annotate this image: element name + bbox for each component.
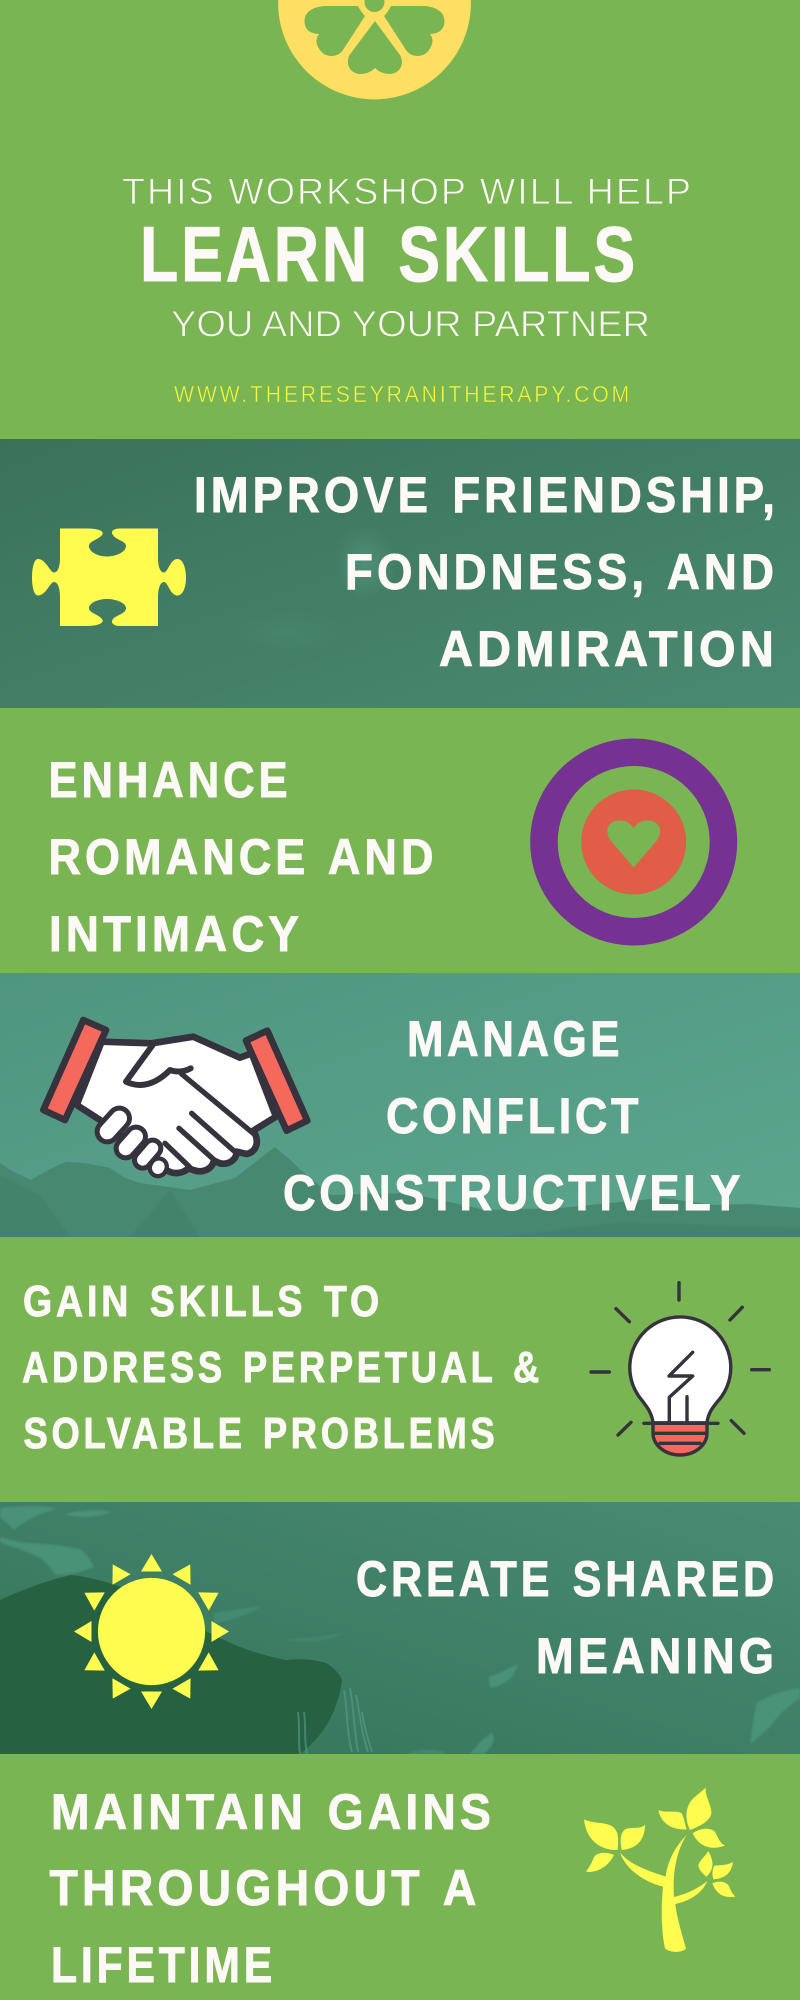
panel: conflict: [0, 973, 800, 1237]
text: this workshop will help: THIS WORKSHOP WILL HELP: [122, 170, 693, 212]
panel: perpetual problems: [0, 1237, 800, 1502]
text: gain skills to address perpetual and solvable problems: GAIN SKILLS TO: [23, 1277, 383, 1326]
icon: light bulb: [591, 1283, 769, 1455]
text: maintain gains throughout a lifetime: MAINTAIN GAINS: [51, 1784, 495, 1840]
panel: maintain gains: [0, 1754, 800, 2000]
text: create shared meaning: [356, 1551, 778, 1684]
text: enhance romance and intimacy: INTIMACY: [49, 906, 303, 962]
icon: target with heart: [530, 738, 737, 946]
text: improve friendship, fondness, and admiration: [194, 467, 779, 677]
text: enhance romance and intimacy: [48, 752, 438, 962]
icon: sun: [74, 1554, 229, 1709]
icon: handshake: [43, 1020, 307, 1173]
icon: puzzle piece: [32, 528, 186, 626]
text: manage conflict constructively: [283, 1011, 744, 1221]
waterfalls: [298, 1688, 372, 1754]
text: maintain gains throughout a lifetime: LIFETIME: [51, 1937, 276, 1993]
panel: friendship: [0, 439, 800, 708]
text: manage conflict constructively: CONSTRUCTIVELY: [283, 1165, 744, 1221]
text: improve friendship, fondness, and admiration: ADMIRATION: [439, 621, 778, 677]
text: gain skills to address perpetual and solvable problems: [22, 1277, 543, 1458]
panel: romance: [0, 708, 800, 973]
text: enhance romance and intimacy: ROMANCE AND: [48, 829, 438, 885]
text: manage conflict constructively: MANAGE: [407, 1011, 623, 1067]
text: create shared meaning: MEANING: [536, 1628, 778, 1684]
text: gain skills to address perpetual and solvable problems: SOLVABLE PROBLEMS: [24, 1409, 498, 1458]
text: manage conflict constructively: CONFLICT: [386, 1088, 642, 1144]
title: learn skills: LEARN SKILLS: [140, 210, 638, 298]
text: enhance romance and intimacy: ENHANCE: [48, 752, 292, 808]
text: gain skills to address perpetual and solvable problems: ADDRESS PERPETUAL &: [22, 1343, 543, 1392]
icon: tree with leaves: [584, 1788, 736, 1952]
text: you and your partner: YOU AND YOUR PARTNER: [171, 302, 650, 344]
text: website url: WWW.THERESEYRANITHERAPY.COM: [174, 381, 632, 407]
panel: header: [0, 0, 800, 439]
text: maintain gains throughout a lifetime: [50, 1784, 495, 1993]
text: maintain gains throughout a lifetime: THROUGHOUT A: [50, 1860, 480, 1916]
icon: flower badge: [278, 0, 471, 99]
panel: shared meaning: [0, 1502, 800, 1754]
